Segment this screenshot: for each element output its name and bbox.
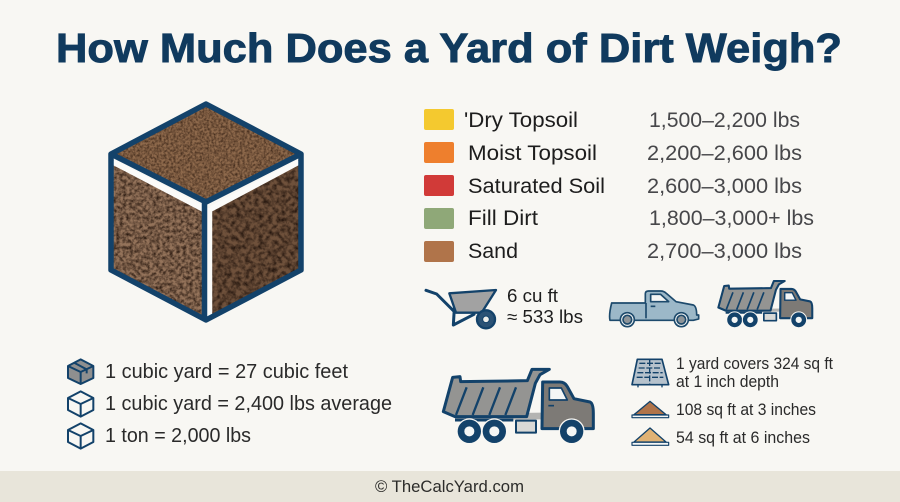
footer xyxy=(0,471,900,502)
fact: cubic feet: 1 cubic yard = 27 cubic feet xyxy=(105,360,348,383)
icon: soil cube xyxy=(111,104,301,320)
coverage text: 3 inches: 108 sq ft at 3 inches xyxy=(676,401,816,419)
label: saturated soil: Saturated Soil xyxy=(468,174,605,198)
label: sand: Sand xyxy=(468,239,518,263)
cube top face xyxy=(113,106,299,202)
wheelbarrow capacity text xyxy=(507,286,583,327)
coverage text: 6 inches: 54 sq ft at 6 inches xyxy=(676,429,810,447)
title: How Much Does a Yard of Dirt Weigh? xyxy=(56,25,842,71)
value: dry topsoil: 1,500–2,200 lbs xyxy=(649,109,800,132)
swatch: moist topsoil xyxy=(424,142,454,163)
wheelbarrow capacity text: ≈ 533 lbs xyxy=(507,307,583,327)
cube right face xyxy=(212,160,299,318)
label: fill dirt: Fill Dirt xyxy=(468,206,538,230)
swatch: sand xyxy=(424,241,454,262)
cube navy outline xyxy=(111,104,301,320)
panel: coverage facts: at 1 inch depth xyxy=(676,373,779,391)
icon: cube outline xyxy=(68,391,93,417)
icon: small dump truck xyxy=(718,281,812,328)
icon: cube outline xyxy=(68,423,93,449)
icon: large dump truck xyxy=(443,369,593,444)
label: dry topsoil: ʹDry Topsoil xyxy=(464,108,578,132)
value: fill dirt: 1,800–3,000+ lbs xyxy=(649,207,814,230)
swatch: saturated soil xyxy=(424,175,454,196)
icon: soil pile xyxy=(632,401,669,418)
wheelbarrow capacity text: 6 cu ft xyxy=(507,286,558,306)
coverage text: 1 inch: 1 yard covers 324 sq ft xyxy=(676,355,833,373)
panel: coverage facts xyxy=(632,355,833,447)
value: moist topsoil: 2,200–2,600 lbs xyxy=(647,142,802,165)
icon: coverage area grid xyxy=(632,359,669,387)
label: moist topsoil: Moist Topsoil xyxy=(468,141,597,165)
swatch: dry topsoil xyxy=(424,109,454,130)
icon: wheelbarrow xyxy=(426,290,496,328)
swatch: fill dirt xyxy=(424,208,454,229)
cube white edges xyxy=(113,162,299,316)
fact: ton: 1 ton = 2,000 lbs xyxy=(105,424,251,447)
footer credit: © TheCalcYard.com xyxy=(375,478,524,496)
value: sand: 2,700–3,000 lbs xyxy=(647,240,802,263)
cube left face xyxy=(113,160,202,318)
footer band xyxy=(0,471,900,502)
icon: pickup truck xyxy=(610,291,699,327)
value: saturated soil: 2,600–3,000 lbs xyxy=(647,175,802,198)
panel: conversion facts xyxy=(68,359,392,449)
icon: filled cube xyxy=(68,359,93,384)
fact: average weight: 1 cubic yard = 2,400 lbs average xyxy=(105,392,392,415)
icon: sand pile xyxy=(632,428,669,445)
panel: soil weight legend xyxy=(424,108,814,263)
